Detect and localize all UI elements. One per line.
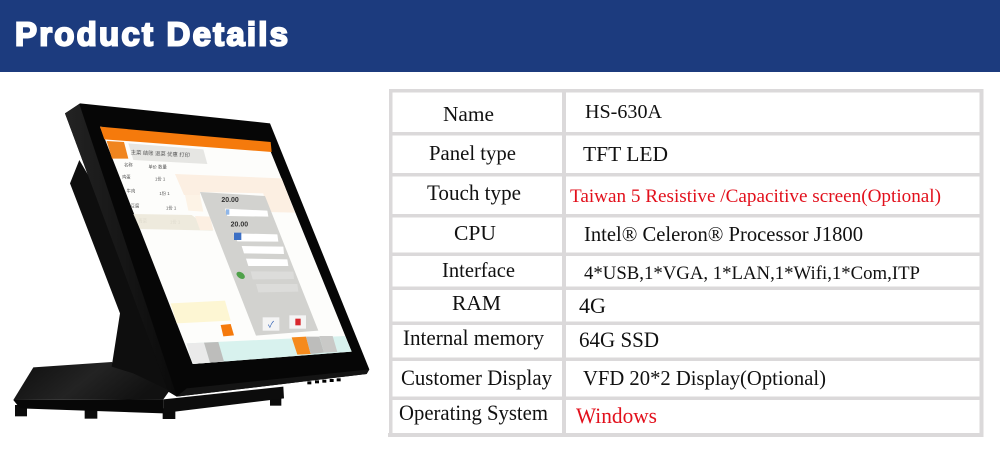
- header banner: [0, 0, 1000, 72]
- cancel button: [289, 315, 306, 329]
- row: CPU: [454, 221, 863, 246]
- order list rows: 名称: [124, 162, 133, 169]
- row: Interface: 4*USB,1*VGA, 1*LAN,1*Wifi,1*Com,ITP: [584, 263, 920, 284]
- title: Product Details: [15, 16, 288, 52]
- tab row: [107, 141, 128, 159]
- row: Operating System: [399, 400, 657, 428]
- order list rows: 牛肉: [127, 188, 135, 195]
- base: [13, 362, 284, 419]
- row: CPU: Intel® Celeron® Processor J1800: [584, 222, 863, 246]
- row: Panel type: Panel type: [429, 141, 516, 165]
- row: Touch type: [427, 180, 941, 207]
- payment dialog: ✓: [268, 319, 274, 329]
- orange action button: [221, 324, 234, 336]
- screen: [100, 127, 352, 364]
- order list rows: 单价 数量: [148, 163, 168, 170]
- tab labels: 主菜 结账 退菜 优惠 打印: [131, 148, 190, 159]
- row: Name: Name: [443, 102, 494, 126]
- payment dialog: 20.00: [231, 222, 248, 229]
- orange top bar: [100, 127, 272, 152]
- row: RAM: [452, 291, 606, 318]
- buttons: [307, 378, 341, 384]
- order list rows: [122, 162, 181, 225]
- row: Panel type: [429, 141, 668, 166]
- amount labels: 20.00: [221, 197, 239, 204]
- row: Interface: Interface: [442, 258, 515, 282]
- row: Interface: [442, 258, 920, 284]
- row: Internal memory: [403, 325, 659, 352]
- menu tiles: [175, 174, 295, 213]
- bottom category bar: [187, 336, 352, 364]
- row: Internal memory: 64G SSD: [579, 327, 659, 352]
- row: Customer Display: VFD 20*2 Display(Optional): [583, 366, 826, 390]
- row: Customer Display: Customer Display: [401, 365, 552, 390]
- row: Touch type: Taiwan 5 Resistive /Capacitive screen(Optional): [570, 186, 941, 207]
- row: Internal memory: Internal memory: [403, 325, 544, 350]
- order list rows: 1份 1: [166, 204, 177, 211]
- order list rows: 青菜: [138, 217, 148, 224]
- monitor bezel: [65, 103, 369, 397]
- stand: [70, 160, 180, 390]
- row: RAM: RAM: [452, 291, 501, 315]
- row: Touch type: Touch type: [427, 180, 521, 205]
- order list rows: 豆腐: [131, 203, 140, 210]
- row: Customer Display: [401, 365, 826, 390]
- row: Panel type: TFT LED: [583, 142, 668, 166]
- specification table: [388, 89, 984, 437]
- order list rows: 1份 1: [155, 176, 166, 183]
- payment dialog: [200, 192, 318, 336]
- row: RAM: 4G: [579, 293, 606, 318]
- note box: [171, 301, 231, 323]
- order list rows: 鸡蛋: [122, 173, 131, 180]
- row: Operating System: Windows: [576, 403, 657, 428]
- row: Name: [443, 101, 662, 126]
- order list rows: 1份 1: [159, 190, 170, 197]
- product photo: POS terminal: [13, 103, 369, 419]
- confirm button: [263, 317, 279, 331]
- table grid: [388, 89, 984, 437]
- row: Name: HS-630A: [585, 101, 662, 123]
- order list rows: 1份 1: [170, 218, 181, 225]
- row: CPU: CPU: [454, 221, 496, 245]
- row: Operating System: Operating System: [399, 400, 548, 425]
